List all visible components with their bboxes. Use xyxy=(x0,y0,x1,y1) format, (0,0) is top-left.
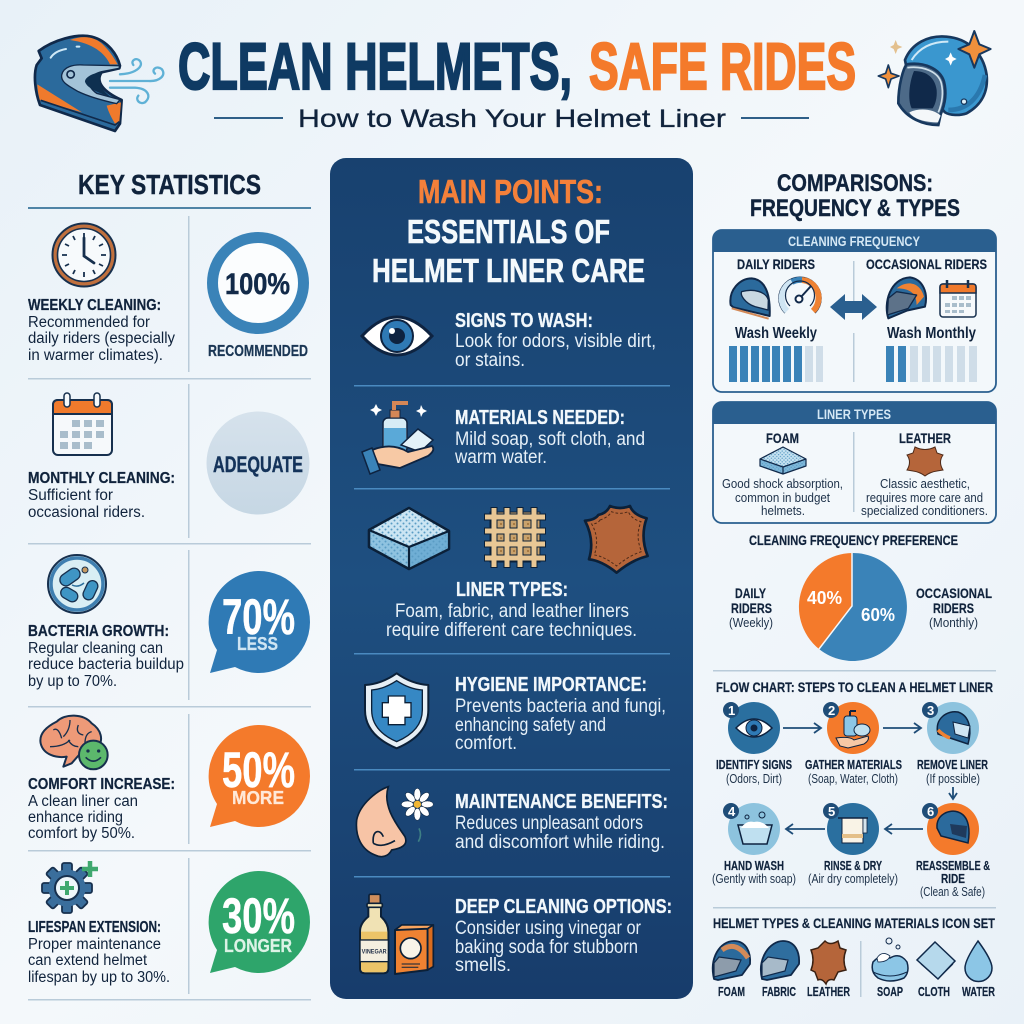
panel: cleaning frequency: CLEANING FREQUENCY xyxy=(788,234,920,249)
icon set: helmet types and cleaning materials: CLOTH xyxy=(918,985,950,999)
stat text: comfort increase: COMFORT INCREASE: xyxy=(28,776,175,793)
heading: main points: MAIN POINTS: xyxy=(418,173,603,210)
heading: main points: ESSENTIALS OF xyxy=(407,213,610,250)
icon: foam helmet xyxy=(713,941,750,980)
stat bubble: 30% longer xyxy=(209,871,310,973)
panel: liner types comparison: requires more care and xyxy=(866,490,983,505)
pie chart: cleaning frequency preference: OCCASIONAL xyxy=(916,586,992,601)
item: liner types: require different care techniques. xyxy=(386,620,637,641)
panel: key statistics xyxy=(28,169,311,1000)
item: liner types: LINER TYPES: xyxy=(456,579,568,601)
icon: shield with cross xyxy=(365,673,428,748)
icons: foam, fabric, leather liners xyxy=(369,506,648,573)
icon: nose and flower xyxy=(356,787,433,857)
stat text: weekly cleaning: daily riders (especially xyxy=(28,330,175,347)
stat: 100% recommended: RECOMMENDED xyxy=(208,343,308,360)
step 2: gather materials xyxy=(805,702,902,786)
step 2: gather materials: GATHER MATERIALS xyxy=(805,758,902,772)
panel: liner types comparison xyxy=(713,402,996,523)
icon: daily rider helmet xyxy=(730,278,770,319)
item: deep cleaning options: smells. xyxy=(455,955,511,976)
panel: liner types comparison: LINER TYPES xyxy=(817,407,891,422)
item: maintenance benefits: and discomfort while riding. xyxy=(455,832,665,853)
panel: liner types comparison: Good shock absorption, xyxy=(722,476,843,491)
item: materials needed: warm water. xyxy=(454,447,547,468)
bars: weekly xyxy=(729,346,823,382)
panel: liner types comparison: LEATHER xyxy=(899,431,951,446)
icon: leather xyxy=(811,941,846,984)
icon set: helmet types and cleaning materials xyxy=(713,915,995,999)
icon set: helmet types and cleaning materials: LEATHER xyxy=(807,985,850,999)
title: SAFE RIDES xyxy=(589,29,856,103)
stat text: bacteria growth: by up to 70%. xyxy=(28,673,117,690)
pie chart: cleaning frequency preference: (Weekly) xyxy=(729,615,773,630)
stat bubble: 70% less xyxy=(209,571,310,673)
step 5: rinse and dry: 5 xyxy=(828,804,835,819)
icon: leather small xyxy=(907,447,943,476)
pie chart: cleaning frequency preference: DAILY xyxy=(735,586,766,601)
step 6: reassemble and ride xyxy=(916,803,990,899)
icon: bacteria petri dish xyxy=(48,555,106,613)
pie chart: cleaning frequency preference: CLEANING FREQUENCY PREFERENCE xyxy=(749,532,958,548)
icon: leather hide xyxy=(585,506,648,573)
item: deep cleaning options: Consider using vinegar or xyxy=(455,918,642,939)
stat: adequate xyxy=(206,412,310,514)
icon: woven fabric xyxy=(484,507,546,568)
subtitle: How to Wash Your Helmet Liner xyxy=(298,105,726,133)
step 4: hand wash: 4 xyxy=(728,804,736,819)
item: materials needed: Mild soap, soft cloth, and xyxy=(455,429,645,450)
stat bubble: 50% more: MORE xyxy=(232,788,284,808)
icon: calendar small xyxy=(940,280,976,317)
stat text: weekly cleaning: Recommended for xyxy=(28,314,150,331)
stat text: weekly cleaning xyxy=(28,297,175,364)
heading: comparisons xyxy=(750,170,960,222)
stat text: bacteria growth: BACTERIA GROWTH: xyxy=(28,623,169,640)
pie chart: cleaning frequency preference: 60% xyxy=(861,605,895,625)
item: hygiene importance: Prevents bacteria and fungi, xyxy=(455,696,666,717)
item: liner types xyxy=(386,579,637,641)
icon: open-face helmet with sparkles xyxy=(878,31,991,125)
step 5: rinse and dry: (Air dry completely) xyxy=(808,872,898,886)
step 5: rinse and dry: RINSE & DRY xyxy=(824,859,882,873)
stat text: monthly cleaning: occasional riders. xyxy=(28,504,145,521)
item: materials needed xyxy=(454,407,645,468)
heading: main points: HELMET LINER CARE xyxy=(372,252,645,289)
stat text: lifespan extension: Proper maintenance xyxy=(28,936,161,953)
icon: water drop xyxy=(965,941,992,982)
item: materials needed: MATERIALS NEEDED: xyxy=(455,407,625,429)
stat text: comfort increase: A clean liner can xyxy=(28,793,138,810)
stat bubble: 70% less: LESS xyxy=(237,634,278,654)
panel: main points xyxy=(330,158,693,999)
heading: comparisons: FREQUENCY & TYPES xyxy=(750,195,960,222)
icon: gear with plus xyxy=(42,861,98,913)
stat bubble: 50% more: 50% xyxy=(222,742,295,798)
panel: comparisons xyxy=(712,170,996,999)
icon set: helmet types and cleaning materials: FOAM xyxy=(718,985,745,999)
icon: foam block xyxy=(369,508,449,569)
pie chart: cleaning frequency preference: 40% xyxy=(807,588,842,608)
icon: eye xyxy=(362,317,432,355)
icon: soap xyxy=(872,938,908,981)
step 3: remove liner xyxy=(917,702,988,786)
step 4: hand wash: (Gently with soap) xyxy=(712,872,796,886)
panel: liner types comparison: FOAM xyxy=(766,431,799,446)
heading: key statistics: KEY STATISTICS xyxy=(78,169,261,200)
stat text: comfort increase xyxy=(28,776,175,842)
pie chart: cleaning frequency preference: (Monthly) xyxy=(929,615,978,630)
heading: main points xyxy=(372,173,645,289)
item: maintenance benefits: MAINTENANCE BENEFITS: xyxy=(455,791,668,813)
step 3: remove liner: 3 xyxy=(927,703,934,718)
panel: cleaning frequency: Wash Monthly xyxy=(887,325,976,342)
arrow xyxy=(786,824,825,834)
icon: calendar xyxy=(53,393,112,455)
stat text: bacteria growth: reduce bacteria buildup xyxy=(28,656,184,673)
bars: monthly xyxy=(886,346,977,382)
pie chart: cleaning frequency preference xyxy=(729,532,992,661)
stat: 100% recommended xyxy=(208,238,308,360)
stat bubble: 30% longer: 30% xyxy=(222,888,295,944)
title: CLEAN HELMETS, xyxy=(178,29,572,103)
icon: racing helmet with air swirl xyxy=(35,36,163,131)
item: signs to wash: Look for odors, visible dirt, xyxy=(455,331,656,352)
icon: occasional rider helmet xyxy=(887,277,926,318)
stat text: weekly cleaning: WEEKLY CLEANING: xyxy=(28,297,161,314)
panel: cleaning frequency: Wash Weekly xyxy=(735,325,817,342)
icon: fabric helmet xyxy=(761,941,799,980)
step 3: remove liner: (If possible) xyxy=(926,772,980,786)
item: deep cleaning options xyxy=(455,896,672,976)
step 2: gather materials: 2 xyxy=(828,703,835,718)
icon: hand with soap xyxy=(362,403,433,474)
stat text: monthly cleaning xyxy=(28,470,175,521)
icon: clock xyxy=(52,224,116,286)
icon set: helmet types and cleaning materials: FABRIC xyxy=(762,985,796,999)
icon set: helmet types and cleaning materials: WATER xyxy=(962,985,995,999)
icon: cloth xyxy=(917,942,955,979)
step 6: reassemble and ride: RIDE xyxy=(941,872,965,886)
stat: adequate: ADEQUATE xyxy=(213,452,303,477)
stat text: lifespan extension: can extend helmet xyxy=(28,952,148,969)
panel: liner types comparison: helmets. xyxy=(761,503,805,518)
stat bubble: 30% longer: LONGER xyxy=(224,936,292,956)
item: deep cleaning options: baking soda for stubborn xyxy=(455,937,638,958)
arrow: double headed xyxy=(830,294,877,320)
stat text: lifespan extension: lifespan by up to 30%. xyxy=(28,969,170,986)
step 1: identify signs xyxy=(716,702,792,786)
item: hygiene importance: HYGIENE IMPORTANCE: xyxy=(455,674,647,696)
step 6: reassemble and ride: (Clean & Safe) xyxy=(920,885,985,899)
item: maintenance benefits: Reduces unpleasant odors xyxy=(455,813,643,834)
flow chart: steps to clean a helmet liner xyxy=(712,679,993,899)
step 1: identify signs: (Odors, Dirt) xyxy=(726,772,782,786)
step 5: rinse and dry xyxy=(808,803,898,886)
heading: comparisons: COMPARISONS: xyxy=(777,170,933,197)
item: maintenance benefits xyxy=(455,791,668,853)
stat text: weekly cleaning: in warmer climates). xyxy=(28,347,163,364)
stat: 100% recommended: 100% xyxy=(225,268,290,301)
pie chart: cleaning frequency preference: RIDERS xyxy=(731,601,772,616)
panel: liner types comparison: common in budget xyxy=(735,490,830,505)
stat text: lifespan extension xyxy=(28,919,170,986)
step 1: identify signs: 1 xyxy=(728,703,735,718)
step 3: remove liner: REMOVE LINER xyxy=(917,758,988,772)
stat text: comfort increase: enhance riding xyxy=(28,809,123,826)
item: hygiene importance xyxy=(455,674,666,754)
panel: cleaning frequency xyxy=(713,230,996,392)
item: signs to wash xyxy=(455,310,656,371)
step 4: hand wash xyxy=(712,803,796,886)
icon: speedometer xyxy=(779,277,821,313)
item: signs to wash: or stains. xyxy=(455,350,525,371)
stat text: lifespan extension: LIFESPAN EXTENSION: xyxy=(28,919,161,936)
arrow xyxy=(883,723,921,733)
step 4: hand wash: HAND WASH xyxy=(724,859,784,873)
icon: vinegar bottle and baking soda box: VINEGAR xyxy=(362,948,387,955)
arrow xyxy=(783,723,821,733)
step 6: reassemble and ride: 6 xyxy=(927,804,934,819)
stat bubble: 70% less: 70% xyxy=(222,589,295,645)
item: hygiene importance: enhancing safety and xyxy=(455,715,606,736)
arrow xyxy=(949,787,957,799)
stat text: monthly cleaning: Sufficient for xyxy=(28,487,113,504)
icon: vinegar bottle and baking soda box xyxy=(360,894,433,974)
panel: liner types comparison: Classic aesthetic, xyxy=(880,476,970,491)
stat text: bacteria growth xyxy=(28,623,184,690)
arrow xyxy=(885,824,923,834)
panel: liner types comparison: specialized conditioners. xyxy=(861,503,988,518)
step 2: gather materials: (Soap, Water, Cloth) xyxy=(808,772,898,786)
stat text: bacteria growth: Regular cleaning can xyxy=(28,640,163,657)
item: liner types: Foam, fabric, and leather liners xyxy=(395,601,629,622)
item: deep cleaning options: DEEP CLEANING OPTIONS: xyxy=(455,896,672,918)
icon: brain with smiley xyxy=(40,716,108,769)
panel: cleaning frequency: DAILY RIDERS xyxy=(737,257,815,272)
step 6: reassemble and ride: REASSEMBLE & xyxy=(916,859,990,873)
stat bubble: 50% more xyxy=(209,725,310,827)
stat text: comfort increase: comfort by 50%. xyxy=(28,825,135,842)
icon: foam small xyxy=(760,447,806,474)
icon set: helmet types and cleaning materials: SOAP xyxy=(877,985,903,999)
pie chart: cleaning frequency preference: RIDERS xyxy=(933,601,974,616)
item: hygiene importance: comfort. xyxy=(455,733,517,754)
stat text: monthly cleaning: MONTHLY CLEANING: xyxy=(28,470,175,487)
header xyxy=(35,29,991,133)
panel: cleaning frequency: OCCASIONAL RIDERS xyxy=(866,257,987,272)
step 1: identify signs: IDENTIFY SIGNS xyxy=(716,758,792,772)
item: signs to wash: SIGNS TO WASH: xyxy=(455,310,593,332)
